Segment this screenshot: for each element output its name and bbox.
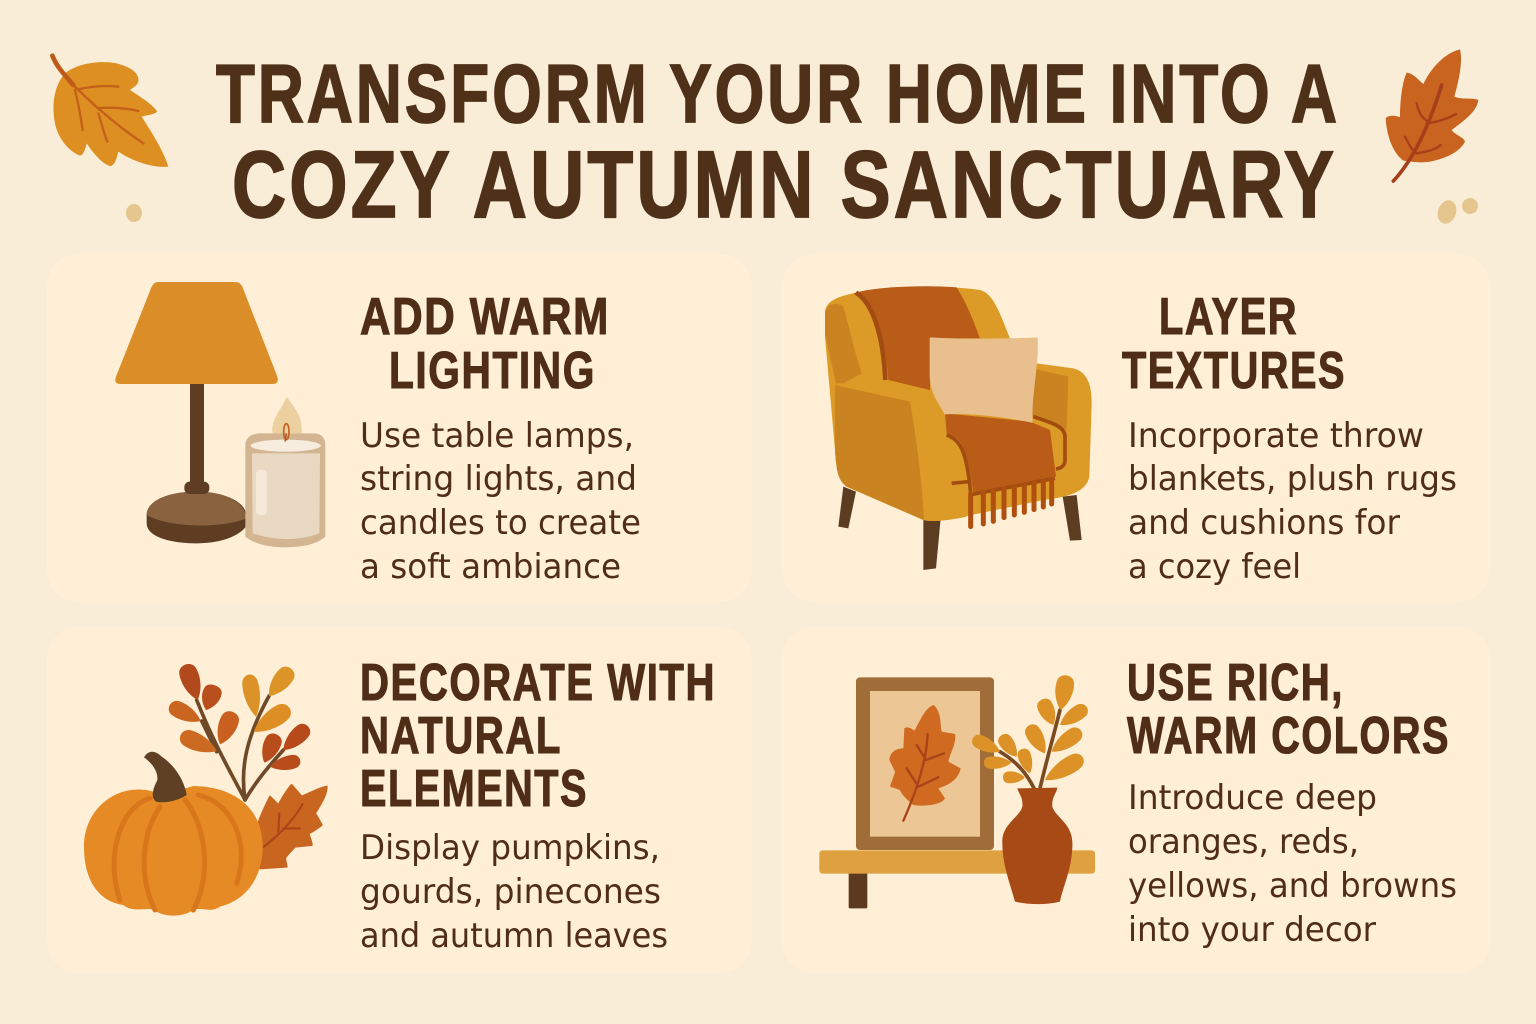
body text <box>360 416 641 587</box>
body text: Use table lamps, <box>360 416 634 456</box>
body text <box>360 828 668 956</box>
panel: add warm lighting <box>47 254 752 602</box>
title <box>216 47 1340 238</box>
body text: Introduce deep <box>1128 778 1377 818</box>
heading <box>360 654 716 818</box>
heading: ELEMENTS <box>360 760 588 818</box>
body text: Incorporate throw <box>1128 416 1424 456</box>
body text: oranges, reds, <box>1128 822 1359 862</box>
body text: into your decor <box>1128 910 1376 950</box>
heading: ADD WARM <box>360 288 610 346</box>
heading: LIGHTING <box>389 342 596 400</box>
body text: candles to create <box>360 503 641 543</box>
heading: USE RICH, <box>1127 654 1344 712</box>
body text: a cozy feel <box>1128 547 1301 587</box>
heading: NATURAL <box>360 707 562 765</box>
icon: top left autumn leaf <box>52 56 168 167</box>
decorative dot left <box>126 204 142 222</box>
heading: DECORATE WITH <box>360 654 716 712</box>
body text: string lights, and <box>360 459 637 499</box>
icon: pumpkin with branches and leaf <box>84 662 327 916</box>
panel: decorate with natural elements <box>47 627 752 973</box>
body text: yellows, and browns <box>1128 866 1457 906</box>
body text: Display pumpkins, <box>360 828 660 868</box>
panel: use rich warm colors <box>782 627 1490 973</box>
panel: layer textures <box>782 254 1490 602</box>
icon: candle <box>245 397 325 547</box>
body text: and autumn leaves <box>360 916 668 956</box>
heading: TEXTURES <box>1122 342 1346 400</box>
heading <box>360 288 610 400</box>
heading <box>1122 288 1346 400</box>
body text: and cushions for <box>1128 503 1400 543</box>
icon: armchair with throw blanket <box>825 286 1092 570</box>
heading: LAYER <box>1159 288 1298 346</box>
icon: table lamp <box>115 282 278 543</box>
body text: gourds, pinecones <box>360 872 661 912</box>
decorative dots right <box>1434 198 1478 226</box>
body text: a soft ambiance <box>360 547 621 587</box>
body text <box>1128 416 1457 587</box>
body text: blankets, plush rugs <box>1128 459 1457 499</box>
icon: top right autumn leaf <box>1386 49 1478 181</box>
body text <box>1128 778 1457 950</box>
heading <box>1127 654 1450 765</box>
icon: framed leaf, shelf and vase <box>819 674 1095 908</box>
